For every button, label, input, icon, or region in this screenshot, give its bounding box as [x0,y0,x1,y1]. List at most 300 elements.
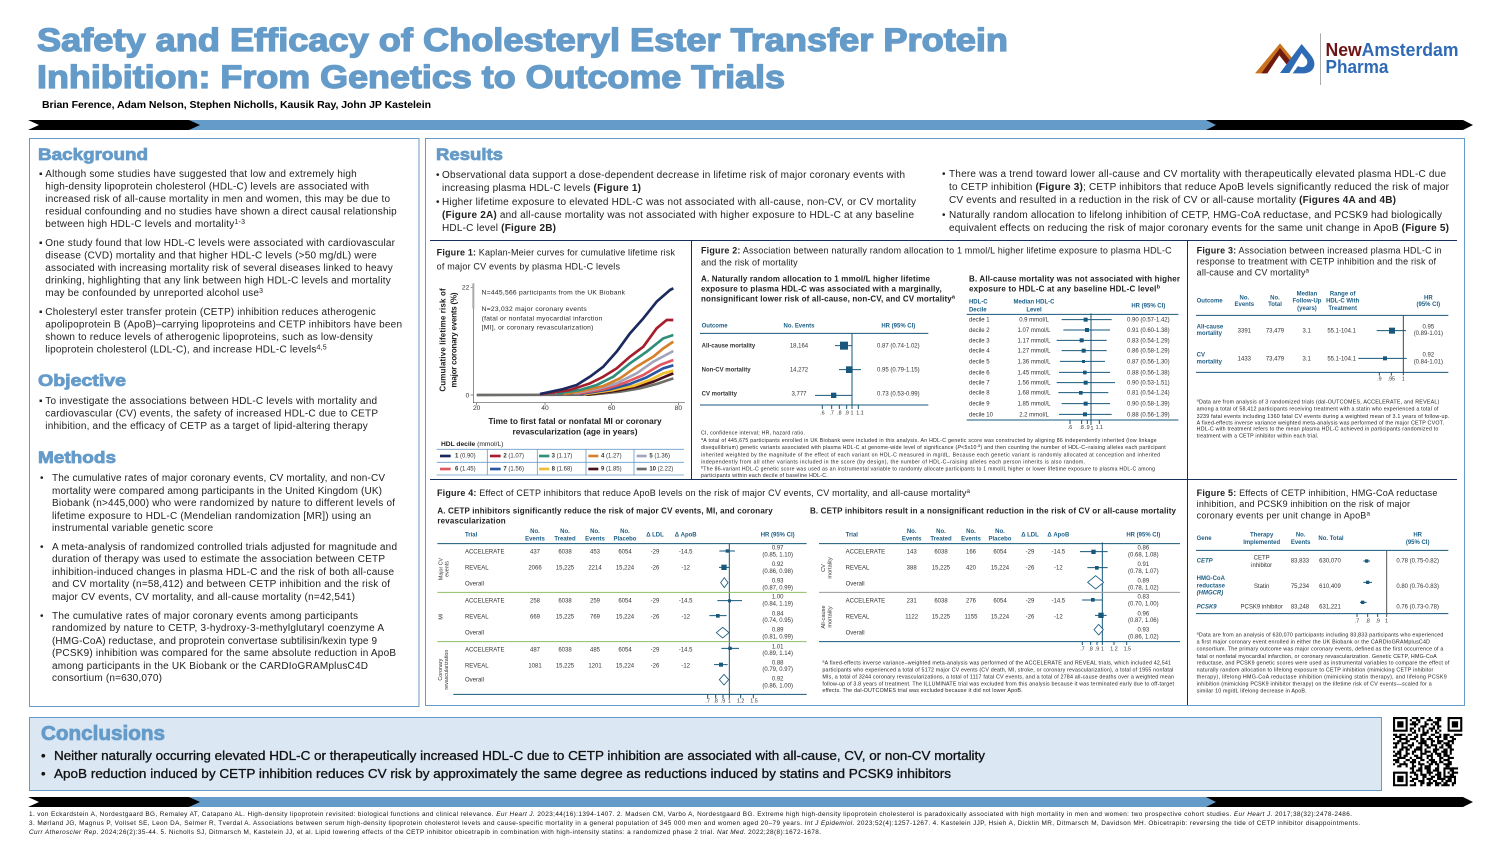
table rows: -29 [651,599,660,605]
rows: .95 [1388,377,1395,383]
forest plot B: 1.27 mmol/L [1018,349,1051,355]
text block: conclusions bullets [41,748,986,781]
forest plot B: 0.83 (0.54-1.29) [1127,338,1170,344]
rows: CETP [1254,556,1270,562]
table rows: (0.86, 1.00) [762,684,793,690]
legend: 3 (1.17) [552,454,572,460]
table rows: 0.97 [772,545,784,551]
figure 4 panel B: No. [907,529,917,535]
text block: results left bullets: • [436,170,440,181]
table rows: 6054 [993,550,1007,556]
footnote: fatal or nonfatal myocardial infarction, or coronary revascularization. Genetic CETP, HMG-CoA [1197,654,1437,660]
figure 4 panel B: No. [995,529,1005,535]
authors: Brian Ference, Adam Nelson, Stephen Nicholls, Kausik Ray, John JP Kastelein [42,99,431,111]
forest plot B: 1.17 mmol/L [1018,338,1051,344]
forest plot B: decile 4 [969,349,990,355]
table rows: 1.00 [772,595,784,601]
figure 1: Kaplan-Meier curves: 0 [466,392,470,399]
figure 4 panel A [437,487,970,705]
table rows: 0.88 [772,660,784,666]
footnote: A fixed-effects inverse variance weighted meta-analysis was performed of the major CETP CVOT. [1197,421,1444,427]
panel B heading: exposure to HDL-C at any baseline HDL-C levelb [969,284,1161,293]
title [37,22,1008,95]
rows: 1 [1402,377,1405,383]
rows: 73,479 [1266,329,1285,335]
figure 1: Kaplan-Meier curves: 40 [541,405,549,412]
rows: 1 [1385,618,1388,624]
text block: methods: duration of therapy was used to estimate the association between CETP [52,554,385,565]
table rows: 420 [966,566,977,572]
text block: objective: inhibition, and the efficacy of CETP as a target of lipid-altering therapy [45,421,368,432]
forest plot B: decile 2 [969,328,990,334]
table rows: REVEAL [846,615,870,621]
forest plot B: 1.36 mmol/L [1018,359,1051,365]
table rows: (0.79, 0.97) [762,667,793,673]
rows: .8 [1365,618,1370,624]
table rows: -26 [1026,615,1035,621]
table header: HDL-C With [1326,299,1360,305]
text block: results left bullets [436,170,916,234]
rows: mortality [1197,331,1223,337]
panel: left column [30,138,419,706]
figure 4 panel B: B. CETP inhibitors result in a nonsignificant reduction in the risk of CV or all-cause mortality [810,507,1177,516]
text block: background bullets: may be confounded by unreported alcohol use3 [45,288,263,299]
figure 4 panel A: Figure 4: Effect of CETP inhibitors that reduce ApoB levels on the risk of major CV events, CV mortality, and all-cause mortalitya [437,487,970,498]
table rows: 15,225 [556,664,575,670]
figure 3: CETP inhibition forest plot: all-cause and CV mortalitya [1197,267,1309,278]
y axis title: Cumulative lifetime risk of [439,288,448,392]
text block: results left bullets: increasing plasma HDL-C levels (Figure 1) [442,183,641,194]
forest plot B: decile 9 [969,402,990,408]
rows: Statin [1254,584,1269,590]
forest plot B: 0.91 (0.60-1.38) [1127,328,1170,334]
panel B heading [969,275,1180,293]
table rows: (0.70, 1.00) [1128,602,1159,608]
table rows: 15,225 [932,566,951,572]
table header: Follow-Up [1293,299,1322,305]
text block: background bullets: One study found that low HDL-C levels were associated with cardiovascular [45,238,396,249]
footnote [822,660,1175,694]
figure 3: CETP inhibition forest plot: response to treatment with CETP inhibition and the risk of [1197,257,1436,267]
table rows: 0.89 [1138,578,1150,584]
figure 4 panel B: Placebo [989,537,1012,543]
rows: 610,409 [1319,584,1341,590]
text block: results left bullets: HDL-C level (Figure 2B) [442,223,556,234]
forest plot B: 2.2 mmol/L [1019,412,1049,418]
rows: All-cause [1197,324,1224,330]
text block: background bullets: ▪ [39,238,43,249]
figure 4 panel B: Δ LDL [1021,532,1039,538]
text block: methods: (HMG-CoA) reductase, and proprotein convertase subtilisin/kexin type 9 [52,636,377,647]
table rows: (0.81, 0.99) [762,635,793,641]
text block: methods: consortium (n=630,070) [52,673,162,684]
table header: HR [1413,533,1423,539]
text block: methods: mortality were compared among participants in the United Kingdom (UK) [52,486,382,497]
text block: results right bullets: to CETP inhibition (Figure 3); CETP inhibitors that reduce ApoB levels significantly reduced the risk of major [949,182,1450,193]
figure 2 footnotes: aA total of 445,675 participants enrolled in UK Biobank were included in this analysis. An HDL-C genetic score was constructed by aligning 86 independently inherited (low linkage [701,437,1157,444]
forest plot B: 1.45 mmol/L [1018,370,1051,376]
figure 1: Kaplan-Meier curves: 60 [608,405,616,412]
table rows: 15,224 [616,664,635,670]
forest plot A: No. Events [784,324,815,330]
figure 4 panel B: 1 [1101,647,1104,653]
table rows: ACCELERATE [846,599,885,605]
table rows: -26 [651,615,660,621]
text block: methods: major CV events, CV mortality, and all-cause mortality (n=42,541) [52,592,355,603]
table rows: 1081 [528,664,542,670]
rows: 0.92 [1423,352,1435,358]
legend: 8 (1.68) [552,467,572,473]
figure 4 panel B: Events [961,537,981,543]
figure 5: per unit ApoB forest plot: inhibition, and PCSK9 inhibition on the risk of major [1197,499,1410,509]
table rows: (0.84, 1.19) [762,602,793,608]
table rows: 2066 [528,566,542,572]
figure 4 panel B: No. [936,529,946,535]
figure dividers [430,240,1457,705]
text block: methods: lifetime exposure to HDL-C (Mendelian randomization [MR]) using an [52,511,371,522]
forest plot A: 18,164 [790,344,809,350]
figure 4 panel A: No. [590,529,600,535]
panel A heading: nonsignificant lower risk of all-cause, non-CV, and CV mortalitya [701,294,956,303]
forest plot A: CV mortality [702,392,738,398]
table rows: (0.89, 1.14) [762,651,793,657]
forest plot A: 0.87 (0.74-1.02) [877,344,920,350]
forest plot B: 1.85 mmol/L [1018,402,1051,408]
forest plot B: 0.87 (0.56-1.30) [1127,359,1170,365]
rows: PCSK9 inhibitor [1241,605,1283,611]
text block: conclusions bullets: • [41,766,46,781]
figure 2 footnotes: bThe 86-variant HDL-C genetic score was used as an instrumental variable to randomly allocate participants to 1 mmol/L higher or lower lifetime exposure to plasma HDL-C among [701,465,1155,472]
rows: .9 [1377,377,1382,383]
figure 2 footnotes: independently from all other variants included in the score (by design), the number of HDL-C–raising alleles each person inherits is also random. [701,459,1085,465]
forest plot B: decile 10 [969,412,994,418]
rows: 1433 [1238,356,1252,362]
table rows: -29 [651,648,660,654]
rows: 630,070 [1319,559,1341,565]
x axis title: revascularization (age in years) [512,426,638,436]
table rows: 6038 [558,599,572,605]
forest plot B: 1.1 [1096,425,1103,431]
table rows: 669 [530,615,541,621]
table rows: -14.5 [679,648,693,654]
table rows: (0.87, 1.06) [1128,618,1159,624]
forest plot B: 1.68 mmol/L [1018,391,1051,397]
table header: No. [1296,533,1306,539]
table rows: 2214 [588,566,602,572]
table rows: REVEAL [465,566,489,572]
rows: mortality [1197,360,1223,366]
figure 5: per unit ApoB forest plot [1196,488,1450,694]
footnote: treatment with a CETP inhibitor within each trial. [1197,433,1318,439]
legend: 6 (1.45) [455,467,476,473]
table header: Range of [1330,291,1355,297]
table header: Outcome [1197,299,1223,305]
rotated group labels: mortality [828,557,834,579]
footnote: participants who experienced a total of 5172 major CV events (CV death, MI, stroke, or coronary revascularization), a total of 1955 nonfatal [822,667,1173,673]
rows: 3391 [1238,329,1252,335]
table rows: (0.78, 1.02) [1128,586,1159,592]
table rows: -29 [1026,599,1035,605]
footnote: 3239 fatal events including 1360 fatal CV events during a weighted mean of 3.1 years of follow-up. [1197,414,1449,420]
forest plot A: 1 [851,411,854,417]
text block: results right bullets: Naturally random allocation to lifelong inhibition of CETP, HMG-CoA reductase, and PCSK9 had biologically [949,210,1442,221]
table rows: -26 [651,566,660,572]
table rows: 6054 [993,599,1007,605]
icon: QR code [1393,717,1462,786]
text block: methods: Biobank (n>445,000) who were randomized by nature to different levels of [52,498,395,509]
figure 2 footnotes [701,431,1166,479]
forest plot B: 1.56 mmol/L [1018,381,1051,387]
figure 2: mortality forest plots: Figure 2: Association between naturally random allocation to 1 mmol/L higher lifetime exposure to plasma HDL-C [701,246,1172,256]
forest plot A: HR (95% CI) [881,324,915,330]
text block: background bullets: between high HDL-C levels and mortality1-3 [45,218,245,230]
rows: 631,221 [1319,605,1341,611]
rows: CETP [1197,559,1213,565]
footnote: naturally random allocation to lifelong exposure to CETP inhibition (mimicking CETP inhibitor [1197,667,1434,673]
table rows: 1.01 [772,644,784,650]
forest plot B: Median HDL-C [1014,300,1055,306]
figure 4 panel B: Treated [930,537,952,543]
figure 1: Kaplan-Meier curves: 22 [462,285,470,292]
forest plot A: Non-CV mortality [702,368,751,374]
forest plot B: 0.81 (0.54-1.24) [1127,391,1170,397]
text block: background bullets: high-density lipoprotein cholesterol (HDL-C) levels are associated with [45,182,369,192]
rows: 75,234 [1291,584,1310,590]
forest plot B: decile 7 [969,381,990,387]
table rows: -14.5 [1052,550,1066,556]
table rows: -12 [681,664,691,670]
text block: background bullets: Although some studies have suggested that low and extremely high [45,169,357,180]
table rows: ACCELERATE [846,550,885,556]
panel A heading: A. Naturally random allocation to 1 mmol/L higher lifetime [701,275,931,284]
table rows: -14.5 [1052,599,1066,605]
legend: HDL decile (mmol/L) [441,441,503,448]
table rows: 276 [966,599,977,605]
table header: (years) [1297,306,1317,312]
text block: results right bullets: There was a trend toward lower all-cause and CV mortality with therapeutically elevated plasma HDL-C due [949,169,1446,180]
table rows: 258 [530,599,541,605]
table rows: 0.86 [1138,545,1150,551]
footnote: aData are from an analysis of 630,070 participants including 83,833 participants who experienced [1197,631,1443,638]
table rows: 6038 [558,550,572,556]
text block: conclusions bullets: • [41,748,46,763]
text block: objective: To investigate the associations between HDL-C levels with mortality and [45,396,377,407]
references: 1. von Eckardstein A, Nordestgaard BG, Remaley AT, Catapano AL. High-density lipoprotein revisited: biological functions and clinical relevance. Eur Heart J. 2023;44(16):1394-1407. 2. Madsen CM, Varbo A, Nordestgaard BG. Extreme high high-density lipoprotein cholesterol is paradoxically associated with high mortality in men and women: two prospective cohort studies. Eur Heart J. 2017;38(32):2478-2486. [29,811,1352,818]
figure 4 panel A: HR (95% CI) [761,532,795,538]
text block: objective: cardiovascular (CV) events, the safety of increased HDL-C due to CETP [45,408,378,420]
chart annotations: N=445,566 participants from the UK Biobank [482,289,626,296]
figure 4 panel A: Trial [465,532,478,538]
figure 2 footnotes: participants within each decile of baseline HDL-C. [701,473,828,479]
figure 1: Kaplan-Meier curves: of major CV events by plasma HDL-C levels [437,261,620,271]
text block: results right bullets [942,169,1450,234]
table rows: 1155 [965,615,978,621]
heading: Conclusions: Conclusions [41,723,165,745]
table rows: 0.93 [1138,627,1150,633]
table rows: -14.5 [679,550,693,556]
figure 4 panel B: Δ ApoB [1047,532,1070,538]
logo: NewAmsterdam Pharma: Pharma [1326,57,1389,77]
forest plot A: 0.95 (0.79-1.15) [877,368,920,374]
text block: results right bullets: equivalent effects on reducing the risk of major coronary events for the same unit change in ApoB (Figure 5) [949,223,1449,234]
legend: 5 (1.36) [649,454,670,460]
table rows: 487 [530,648,541,654]
table rows: -26 [651,664,660,670]
text block: background bullets: drinking, highlighting that any link between high HDL-C levels and mortality [45,276,391,286]
figure 4 panel B [810,507,1180,694]
text block: methods: A meta-analysis of randomized controlled trials adjusted for magnitude and [52,542,397,553]
text block: methods: instrumental variable genetic score [52,523,213,534]
text block: conclusions bullets: ApoB reduction induced by CETP inhibition reduces CV risk by approximately the same degree as reductions induced by statins and PCSK9 inhibitors [54,766,952,781]
logo: NewAmsterdam Pharma: NewAmsterdam [1326,40,1458,60]
forest plot B: 0.88 (0.56-1.39) [1127,412,1170,418]
rows: PCSK9 [1197,605,1217,611]
table header: Implemented [1243,540,1280,546]
figure 4 panel B: Trial [846,532,858,538]
table rows: ACCELERATE [465,599,504,605]
figure 4 panel A: No. [530,529,540,535]
forest plot B: 0.9 mmol/L [1019,318,1049,324]
text block: results left bullets: Observational data support a dose-dependent decrease in lifetime risk of major coronary events with [442,170,905,181]
text block: methods: • [40,542,44,553]
table rows: 6038 [934,550,948,556]
figure 4 panel A: Δ ApoB [675,532,697,538]
text block: background bullets: ▪ [39,169,43,180]
references [29,811,1360,836]
HDL decile curves [477,288,673,395]
table rows: 15,225 [932,615,951,621]
chart annotations: N=23,032 major coronary events [482,306,587,313]
footnote: follow-up of 3.8 years of treatment. The ILLUMINATE trial was excluded from this analysis because it was terminated early due to off-target [822,681,1175,687]
footnote: reductase, and PCSK9 genetic scores were used as instrumental variables to compare the effect of [1197,661,1450,667]
table rows [846,545,1159,641]
figure 4 panel B: 1.5 [1124,647,1131,653]
table rows: 231 [907,599,917,605]
forest plot B: HR (95% CI) [1131,304,1165,310]
figure 4 panel B: HR (95% CI) [1126,532,1160,538]
table rows: 6038 [558,648,572,654]
forest plot B: decile 5 [969,359,990,365]
legend [437,441,684,475]
rows: 55.1-104.1 [1327,356,1357,362]
footnote: among a total of 58,412 participants receiving treatment with a statin who experienced a total of [1197,407,1439,413]
table rows: 485 [590,648,601,654]
axes [471,283,685,405]
figure 4 panel A: Events [585,537,605,543]
table header: No. [1240,295,1249,301]
footnote: similar 10 mg/dL lifelong decrease in ApoB. [1197,688,1307,694]
rows: 83,833 [1291,559,1310,565]
table header: Median [1297,291,1318,297]
figure 4 panel B: .7 [1080,647,1085,653]
rows: .9 [1375,618,1380,624]
table rows: 453 [590,550,601,556]
logo: NewAmsterdam Pharma [1255,33,1458,85]
figure 1: Kaplan-Meier curves: Figure 1: Kaplan-Meier curves for cumulative lifetime risk [437,247,675,257]
forest plot B: 0.90 (0.53-1.51) [1127,381,1170,387]
rows: 3.1 [1303,329,1311,335]
rows: 0.80 (0.76-0.83) [1396,584,1439,590]
footnote: aData are from analysis of 3 randomized trials (dal-OUTCOMES, ACCELERATE, and REVEAL) [1197,398,1440,405]
legend: 9 (1.85) [601,467,622,473]
rotated group labels: events [445,561,451,577]
x axis title: Time to first fatal or nonfatal MI or coronary [488,416,662,426]
figure 4: CETP inhibitors forest plots [437,487,1180,705]
figure 4 panel A: Δ LDL [646,532,664,538]
rotated group labels: MI [439,614,445,620]
table rows: 6054 [618,550,632,556]
rows: .7 [1355,618,1359,624]
forest plot A: 0.73 (0.53-0.99) [877,392,920,398]
references: Curr Atheroscler Rep. 2024;26(2):35-44. 5. Nicholls SJ, Ditmarsch M, Kastelein JJ, et al. Lipid lowering effects of the CETP inhibitor obicetrapib in combination with high-intensity statins: a randomized phase 2 trial. Nat Med. 2022;28(8):1672-1678. [29,829,821,836]
table rows: 15,224 [616,615,635,621]
figure 4 panel A: revascularization [437,517,506,526]
rotated group labels [438,557,451,690]
rows [1197,556,1439,624]
table rows: Overall [465,678,484,684]
rows: 0.78 (0.75-0.82) [1396,559,1439,565]
text block: methods: inhibition-induced changes in plasma HDL-C and the risk of both all-cause [52,567,394,578]
figure 4 panel A: Events [525,537,545,543]
table header: HR [1424,295,1433,301]
table rows: ACCELERATE [465,550,504,556]
rows: inhibitor [1251,563,1272,569]
table rows: REVEAL [846,566,870,572]
figure 4 panel B: 1.2 [1110,647,1118,653]
rotated group labels: Coronary [438,658,444,681]
y axis title [439,288,458,392]
table rows: 0.84 [772,611,784,617]
rows: 3.1 [1303,356,1311,362]
table rows: Overall [465,582,484,588]
figure 4 panel A: .7 [705,699,710,705]
forest plot B: 0.90 (0.57-1.42) [1127,318,1170,324]
legend: 7 (1.56) [503,467,524,473]
forest plot A: Outcome [702,324,728,330]
legend: 1 (0.90) [455,454,476,460]
text block: background bullets: lipoprotein cholesterol (LDL-C), and increase HDL-C levels4,5 [45,344,327,356]
figure 4 panel A: 1.5 [750,699,758,705]
chart annotations [482,289,626,331]
rotated group labels: CV [821,564,827,572]
text block: results right bullets: CV events and resulted in a reduction in the risk of CV or all-cause mortality (Figures 4A and 4B) [949,195,1396,206]
figure 4 panel A: .9 [721,699,725,705]
text block: background bullets: Cholesteryl ester transfer protein (CETP) inhibition reduces atherogenic [45,307,376,318]
table header: (95% CI) [1406,540,1429,546]
figure 4 panel B: .9 [1095,647,1099,653]
table rows: 0.91 [1138,562,1150,568]
table rows: Overall [846,631,865,637]
rows: (0.84-1.01) [1414,360,1443,366]
footnote: aA fixed-effects inverse variance–weighted meta-analysis was performed of the ACCELERATE and REVEAL trials, which included 42,541 [822,660,1171,667]
text block: background bullets: increased risk of all-cause mortality in men and women, this may be due to [45,194,390,205]
table header: Treatment [1328,306,1357,312]
title: Safety and Efficacy of Cholesteryl Ester Transfer Protein [37,22,1008,58]
figure 4 panel A: Treated [554,537,576,543]
figure 2 footnotes: CI, confidence interval; HR, hazard ratio. [701,431,805,437]
text block: background bullets [39,169,402,356]
text block: methods: The cumulative rates of major coronary events among participants [52,611,358,622]
references: 3. Mørland JG, Magnus P, Vollset SE, Leon DA, Selmer R, Tverdal A. Associations between serum high-density lipoprotein cholesterol levels and cause-specific mortality in a general population of 345 000 men and women aged 20–79 years. Int J Epidemiol. 2023;52(4):1257-1267. 4. Kastelein JJP, Hsieh A, Dicklin MR, Ditmarsch M, Davidson MH. Obicetrapib: reversing the tide of CETP inhibitor disappointments. [29,820,1360,827]
rows: 0.76 (0.73-0.78) [1396,605,1439,611]
panel A heading [701,275,956,303]
table rows: -29 [651,550,660,556]
figure 1: Kaplan-Meier curves: 20 [473,405,481,412]
figure 2 footnotes: inherited weighted by the magnitude of the effect of each variant on HDL-C measured in mg/dL. Because each genetic variant is randomly allocated at conception and inherited [701,452,1160,458]
table rows: 15,225 [556,566,575,572]
forest plot B: decile 6 [969,370,990,376]
table header: Gene [1197,536,1212,542]
